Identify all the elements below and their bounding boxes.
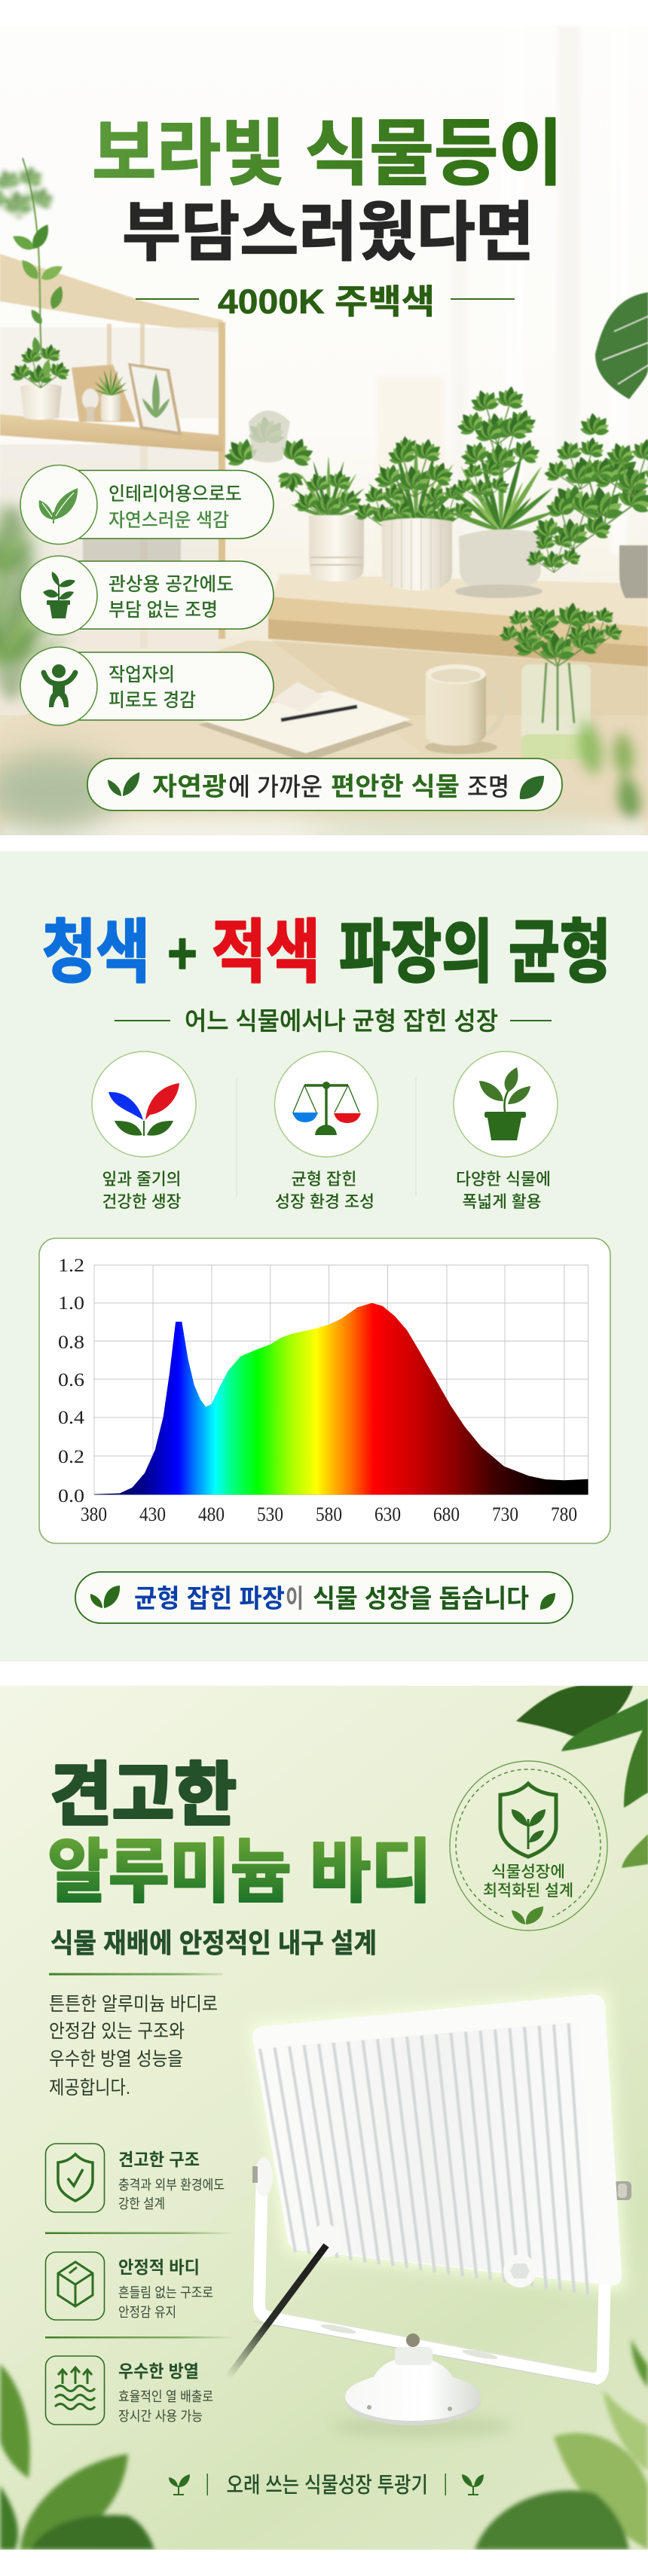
shelf unit: [0, 254, 225, 716]
panel: hero: [0, 26, 648, 854]
y axis labels: 0.6: [58, 1370, 84, 1390]
y axis labels: 0.2: [58, 1447, 84, 1467]
hanging and shelf plants: [0, 158, 319, 500]
feature label: 건강한 생장: [102, 1192, 181, 1211]
icon: scale: [292, 1082, 361, 1135]
separator: [206, 2474, 208, 2495]
y axis labels: 1.0: [58, 1293, 84, 1314]
feature label: 폭넓게 활용: [463, 1192, 541, 1211]
x axis labels: 630: [374, 1503, 401, 1525]
hero title line two: 부담스러웠다면: [122, 197, 534, 269]
feature text: 안정감 유지: [118, 2305, 176, 2320]
hero title line one: 보라빛 식물등이: [92, 114, 563, 194]
spectrum curve: [94, 1303, 588, 1494]
feature: leaves and stem: [92, 1051, 196, 1211]
feature label: 다양한 식물에: [456, 1170, 551, 1189]
y axis labels: 0.0: [58, 1486, 84, 1506]
gradient rule: [49, 1973, 222, 1975]
callout text: 조명: [467, 773, 509, 801]
x axis labels: 380: [81, 1503, 107, 1525]
callout text: 균형 잡힌 파장: [134, 1585, 285, 1613]
feature text: 장시간 사용 가능: [118, 2409, 203, 2424]
icon: shield with sprout: [500, 1784, 556, 1857]
badge: [450, 1761, 607, 1930]
icon: leaves left: [90, 1586, 120, 1608]
callout text: [152, 773, 509, 801]
body copy: 우수한 방열 성능을: [49, 2049, 183, 2070]
book and pen: [198, 682, 414, 762]
icon: blue and red leaves: [109, 1083, 179, 1136]
footer tagline: [169, 2473, 484, 2498]
tagline text: 오래 쓰는 식물성장 투광기: [226, 2473, 428, 2498]
y axis labels: 0.8: [58, 1332, 84, 1353]
feature text: [118, 2257, 213, 2320]
feature text: 강한 설계: [118, 2196, 165, 2211]
x axis labels: 430: [139, 1503, 166, 1525]
icon: small leaves: [512, 1906, 543, 1924]
benefit pill: interior: [20, 465, 274, 544]
body copy: 안정감 있는 구조와: [49, 2021, 185, 2042]
y axis labels: [58, 1256, 85, 1506]
badge text: 식물성장에: [491, 1863, 565, 1881]
feature text: 충격과 외부 환경에도: [118, 2178, 225, 2193]
body copy: [49, 1994, 218, 2098]
housing and fins: [252, 1995, 622, 2295]
right plant sprigs: [393, 383, 610, 454]
window table with pots: [0, 574, 648, 835]
feature: balance: [274, 1051, 378, 1211]
icon: stretching person: [44, 664, 75, 707]
benefit text: 자연스러운 색감: [109, 510, 229, 531]
floodlight product: [228, 1990, 631, 2425]
potted plants on table: [289, 413, 648, 598]
feature text: 흔들림 없는 구조로: [118, 2285, 213, 2300]
feature label: 성장 환경 조성: [275, 1192, 374, 1211]
feature label: 잎과 줄기의: [102, 1170, 181, 1189]
feature label: [275, 1170, 374, 1211]
icon: leaf right: [520, 776, 544, 799]
feature text: 견고한 구조: [118, 2150, 200, 2169]
feature text: 효율적인 열 배출로: [118, 2389, 213, 2404]
fixture glow: [249, 1990, 625, 2291]
section subtitle: 식물 재배에 안정적인 내구 설계: [50, 1927, 377, 1958]
callout text: 식물 성장을 돕습니다: [313, 1585, 529, 1613]
benefit text: [109, 664, 196, 711]
mounting bracket: [252, 2157, 631, 2385]
icon: box: [58, 2262, 93, 2306]
x axis labels: 530: [257, 1503, 283, 1525]
mug: [425, 664, 503, 754]
separator: [445, 2474, 446, 2495]
chart panel: [39, 1238, 610, 1543]
spectrum bottom callout: [75, 1572, 573, 1623]
monstera leaf: [595, 292, 648, 399]
x axis labels: [81, 1503, 577, 1525]
badge text: 최적화된 설계: [483, 1882, 573, 1900]
benefit text: [109, 484, 242, 531]
icon: leaves left: [108, 772, 139, 796]
callout text: 자연광: [152, 773, 227, 801]
benefit text: [109, 574, 234, 621]
icon: shield check: [58, 2154, 93, 2201]
icon: leaf right: [540, 1593, 555, 1610]
hero bottom callout: [87, 758, 562, 810]
hero photo scene: [0, 26, 648, 854]
benefit pill: worker: [20, 647, 274, 725]
x axis labels: 730: [492, 1503, 518, 1525]
feature: sturdy structure: [45, 2144, 225, 2212]
section background and plants: [0, 1686, 648, 2550]
icon: heat arrows and waves: [55, 2367, 95, 2409]
y axis labels: 0.4: [58, 1408, 85, 1428]
feature text: [118, 2361, 213, 2424]
mount base: [320, 2322, 498, 2425]
icon: sprout left: [169, 2474, 190, 2495]
icon: sprout right: [462, 2474, 484, 2495]
feature: stable body: [45, 2252, 213, 2320]
benefit text: 부담 없는 조명: [109, 600, 218, 621]
body copy: 제공합니다.: [49, 2077, 130, 2098]
feature label: [456, 1170, 551, 1211]
spectrum chart: [58, 1256, 588, 1525]
benefit text: 작업자의: [109, 664, 175, 685]
section title: 적색: [212, 914, 320, 991]
hero subtitle with lines: 4000K 주백색: [218, 282, 435, 321]
icon: potted plant: [43, 572, 75, 618]
panel: spectrum: [0, 851, 648, 1662]
x axis labels: 480: [198, 1503, 225, 1525]
feature label: [102, 1170, 181, 1211]
divider: [416, 1077, 417, 1197]
icon: potted plant: [479, 1067, 530, 1140]
x axis labels: 580: [316, 1503, 342, 1525]
callout text: 에 가까운: [228, 773, 322, 801]
y axis labels: 1.2: [58, 1256, 84, 1276]
callout text: [134, 1585, 529, 1613]
glass vase with plant: [495, 598, 626, 759]
section title line one: 견고한: [50, 1757, 237, 1834]
feature label: 균형 잡힌: [291, 1170, 357, 1189]
gradient rule: [45, 2336, 234, 2338]
panel: aluminium body: [0, 1686, 648, 2550]
section title: 청색: [42, 914, 150, 991]
x axis labels: 680: [433, 1503, 460, 1525]
callout text: 편안한 식물: [331, 773, 460, 801]
section title: [42, 914, 611, 991]
callout text: 이: [286, 1585, 304, 1613]
benefit pill: ornamental: [20, 556, 274, 635]
feature text: [118, 2150, 225, 2211]
x axis labels: 780: [551, 1503, 577, 1525]
feature: varied plants: [454, 1051, 558, 1211]
body copy: 튼튼한 알루미늄 바디로: [49, 1994, 218, 2015]
blurred foreground foliage: [0, 496, 648, 844]
gradient rule: [45, 2233, 234, 2234]
badge text: [483, 1863, 573, 1900]
section title line two: 알루미늄 바디: [47, 1834, 432, 1911]
benefit text: 관상용 공간에도: [109, 574, 234, 595]
icon: leaf sprout: [39, 488, 78, 523]
benefit text: 피로도 경감: [109, 690, 196, 711]
feature text: 안정적 바디: [118, 2257, 200, 2277]
power cable: [228, 2245, 326, 2378]
section title: +: [167, 920, 197, 986]
feature: heat dissipation: [45, 2356, 213, 2425]
feature text: 우수한 방열: [118, 2361, 199, 2381]
section subtitle with lines: 어느 식물에서나 균형 잡힌 성장: [185, 1007, 498, 1035]
benefit text: 인테리어용으로도: [109, 484, 242, 505]
